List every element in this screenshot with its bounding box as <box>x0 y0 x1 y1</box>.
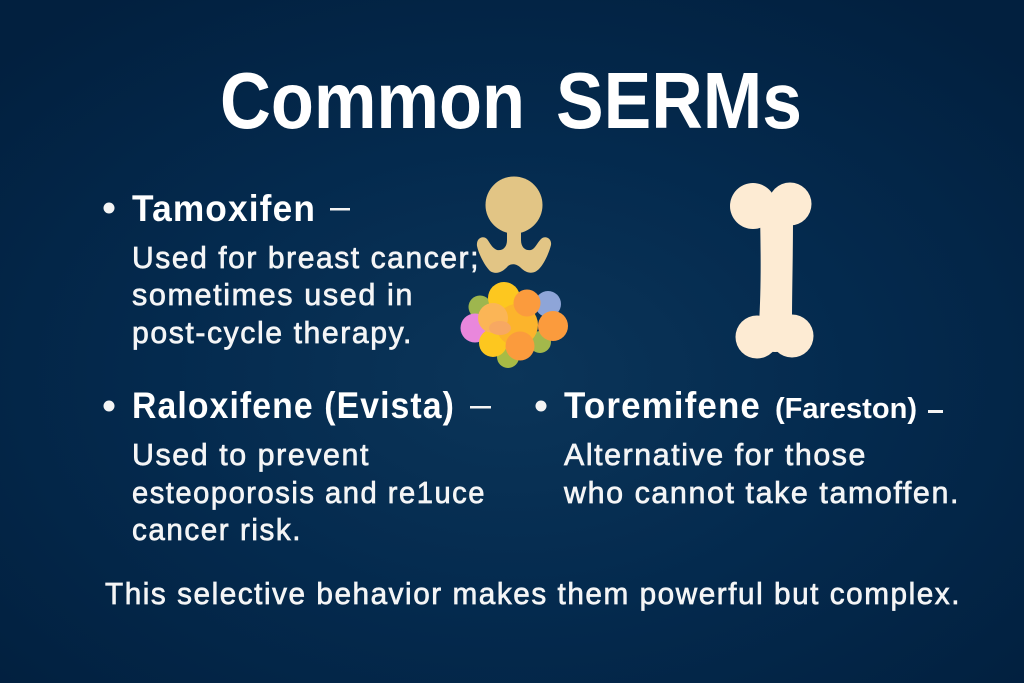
closing statement: This selective behavior makes them powerful but complex. <box>105 576 961 611</box>
item: Tamoxifen <box>104 188 480 350</box>
heading: Toremifene: Toremifene <box>564 385 761 426</box>
bullet: Tamoxifen <box>104 202 114 214</box>
icon: breast / receptor shape <box>477 176 551 273</box>
description: Tamoxifen: post-cycle therapy. <box>132 315 413 350</box>
description: Tamoxifen <box>132 240 480 350</box>
description: Toremifene: Alternative for those <box>564 437 867 472</box>
description: Toremifene: who cannot take tamoffen. <box>563 475 960 510</box>
description: Raloxifene: cancer risk. <box>132 512 302 547</box>
heading: Raloxifene: Raloxifene (Evista) <box>132 385 455 426</box>
brand name: Fareston: (Fareston) <box>775 393 917 425</box>
title: Common <box>220 56 525 145</box>
bullet: Toremifene <box>536 400 546 412</box>
item: Toremifene <box>536 385 960 510</box>
description: Raloxifene: Used to prevent <box>132 437 370 472</box>
description: Tamoxifen: Used for breast cancer; <box>132 240 480 275</box>
description: Raloxifene: esteoporosis and re1uce <box>132 475 486 510</box>
description: Toremifene <box>563 437 960 510</box>
icon: colourful cell cluster <box>460 282 568 368</box>
item: Raloxifene <box>104 385 491 547</box>
bullet: Raloxifene <box>104 400 114 412</box>
title: SERMs <box>556 56 802 145</box>
heading: Tamoxifen: Tamoxifen <box>132 188 316 229</box>
description: Tamoxifen: sometimes used in <box>132 277 414 312</box>
description: Raloxifene <box>132 437 486 547</box>
title <box>220 56 802 145</box>
icon: bone <box>730 182 814 358</box>
